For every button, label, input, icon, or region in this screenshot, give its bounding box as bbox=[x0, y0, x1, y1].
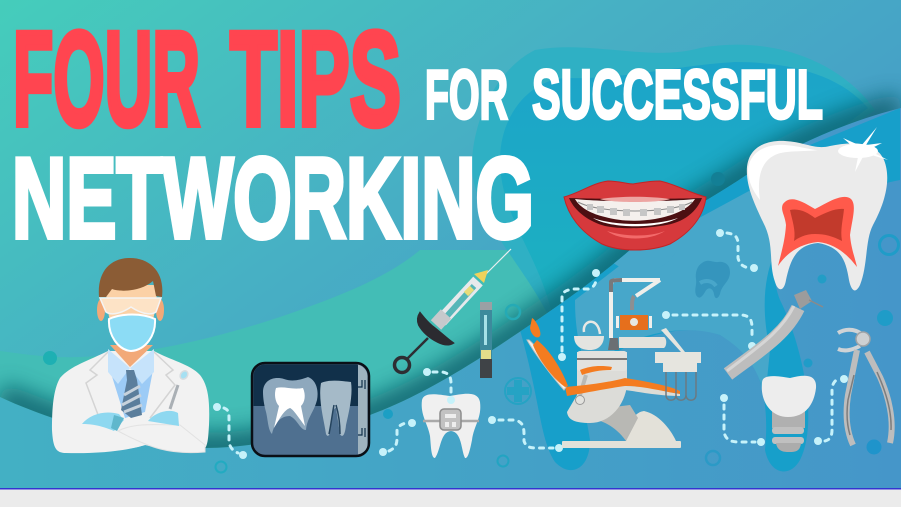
heading: four tips: FOUR bbox=[13, 5, 200, 154]
x-ray incisor bbox=[320, 381, 352, 436]
icon: x-ray bbox=[252, 363, 369, 456]
head bbox=[106, 285, 157, 351]
dashed connectors bbox=[224, 233, 838, 453]
icon: syringe bbox=[394, 249, 511, 372]
tooth pulp bbox=[778, 197, 857, 267]
icon: tooth with braces bbox=[422, 394, 480, 458]
coat bbox=[52, 351, 209, 453]
icon: anesthetic cartridge bbox=[480, 302, 492, 378]
icon: dental handpiece bbox=[727, 290, 823, 374]
instrument tray bbox=[661, 328, 685, 352]
post and lamp arm bbox=[611, 280, 660, 338]
icon: large tooth bbox=[747, 127, 888, 290]
icon: dental implant bbox=[762, 376, 816, 452]
goggles bbox=[100, 298, 161, 314]
arms bbox=[56, 417, 145, 453]
mask bbox=[109, 314, 155, 351]
backrest bbox=[527, 340, 566, 390]
body bbox=[567, 352, 627, 423]
x-ray molar bbox=[263, 377, 318, 434]
connector dots bbox=[213, 229, 848, 459]
lapels bbox=[86, 352, 175, 420]
shirt bbox=[110, 370, 153, 418]
neck bbox=[110, 345, 153, 367]
tie bbox=[121, 370, 142, 418]
dental mirror bbox=[170, 385, 178, 409]
seat bbox=[565, 378, 680, 396]
heading: for successful bbox=[425, 56, 823, 134]
icon: lips with braces bbox=[564, 181, 706, 250]
armrest bbox=[580, 366, 612, 375]
decorative circles bbox=[43, 172, 898, 472]
spittoon bbox=[574, 336, 604, 350]
icon: extraction forceps bbox=[838, 330, 892, 445]
heading: for successful: FOR bbox=[425, 56, 508, 134]
icon: dentist bbox=[52, 258, 209, 453]
sparkle bbox=[843, 127, 888, 172]
hair bbox=[99, 258, 162, 297]
heading: networking: NETWORKING bbox=[12, 136, 534, 262]
icon: dental chair bbox=[527, 280, 701, 448]
lamp bbox=[620, 315, 648, 330]
gloves bbox=[82, 412, 124, 431]
base bbox=[562, 441, 681, 448]
bottom rule bbox=[0, 488, 901, 490]
heading: four tips: TIPS bbox=[230, 5, 401, 154]
collar bbox=[108, 349, 154, 384]
